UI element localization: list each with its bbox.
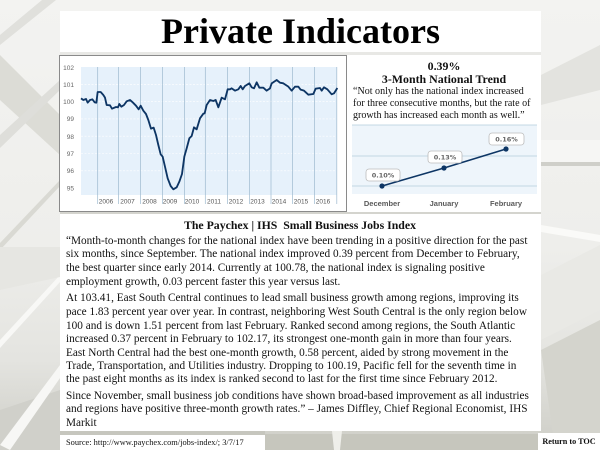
trend quote: “Not only has the national index increased xyxy=(353,86,524,96)
x axis labels: 2016 xyxy=(316,198,331,206)
article body: increased 0.37 percent in February to 102.17, its strongest one-month gain in more than four years. xyxy=(66,333,512,345)
y axis labels: 100 xyxy=(63,99,74,106)
title: Private Indicators xyxy=(161,11,440,51)
mini line chart: 0.13% xyxy=(434,154,457,162)
y axis labels: 99 xyxy=(67,116,74,123)
x axis labels: 2008 xyxy=(142,198,157,206)
y axis labels xyxy=(63,65,74,192)
mini line chart xyxy=(352,124,537,208)
panel: article text xyxy=(60,214,541,431)
mini line chart: December xyxy=(364,199,400,208)
trend heading: 0.39% xyxy=(428,59,460,73)
x axis labels: 2014 xyxy=(272,198,287,206)
y axis labels: 101 xyxy=(63,82,74,89)
article body: pace 1.83 percent year over year. In contrast, neighboring West South Central is the only region below xyxy=(66,306,527,318)
article body: and regions have positive three-month growth rates.” – James Diffley, Chief Regional Economist, IHS xyxy=(66,403,527,415)
panel: 3-month national trend xyxy=(347,55,541,212)
return to TOC button: Return to TOC xyxy=(542,437,596,446)
article body xyxy=(66,234,529,429)
trend heading: 3-Month National Trend xyxy=(382,72,506,86)
article body: six months, since September. The national index improved 0.39 percent from December to February, xyxy=(66,248,520,260)
y axis labels: 96 xyxy=(67,168,74,175)
article heading: The Paychex | IHS Small Business Jobs Index xyxy=(184,218,416,232)
trend heading xyxy=(382,59,506,86)
y axis labels: 97 xyxy=(67,151,74,158)
x axis labels: 2007 xyxy=(120,198,135,206)
x axis labels: 2012 xyxy=(229,198,244,206)
article body: East North Central had the best one-month growth, 0.58 percent, aided by strong movement in the xyxy=(66,346,508,358)
article body: Since November, small business job conditions have shown broad-based improvement as all industries xyxy=(66,390,529,402)
title xyxy=(60,11,541,52)
return to TOC button xyxy=(538,433,600,450)
trend quote: growth has increased each month as well.” xyxy=(353,110,525,120)
article body: At 103.41, East South Central continues to lead small business growth among regions, improving its xyxy=(66,292,519,304)
x axis labels: 2015 xyxy=(294,198,309,206)
article body: 100 and is down 1.51 percent from last February. Ranked second among regions, the South Atlantic xyxy=(66,320,515,332)
panel: line chart of jobs index xyxy=(59,55,347,212)
article body: employment growth, 0.03 percent faster this year versus last. xyxy=(66,276,340,288)
x axis labels: 2010 xyxy=(185,198,200,206)
article body: Markit xyxy=(66,417,97,429)
index line xyxy=(81,80,337,189)
article body: Trade, Transportation, and Utilities industry. Dropping to 100.19, Pacific fell for the seventh time in xyxy=(66,360,516,372)
mini line chart: 0.16% xyxy=(495,136,518,144)
y axis labels: 98 xyxy=(67,134,74,141)
y axis labels: 102 xyxy=(63,65,74,72)
article body: “Month-to-month changes for the national index have been trending in a positive direction for the past xyxy=(66,234,527,246)
article body: the best quarter since early 2014. Currently at 100.78, the national index is signaling positive xyxy=(66,262,485,274)
x axis labels: 2011 xyxy=(207,198,221,206)
trend quote: for three consecutive months, but the rate of xyxy=(353,98,530,108)
mini line chart: 0.10% xyxy=(372,172,395,180)
x axis labels xyxy=(99,198,331,206)
source note: Source: http://www.paychex.com/jobs-index/; 3/7/17 xyxy=(66,438,244,447)
y axis labels: 95 xyxy=(67,186,74,192)
trend quote xyxy=(353,86,530,120)
x axis labels: 2006 xyxy=(99,198,114,206)
mini line chart: January xyxy=(430,199,459,208)
x axis labels: 2013 xyxy=(250,198,265,206)
x axis labels: 2009 xyxy=(163,198,178,206)
article body: the past eight months as its index is ranked second to last for the first time since February 2012. xyxy=(66,373,497,385)
mini line chart: February xyxy=(490,199,523,208)
source note xyxy=(60,435,265,450)
